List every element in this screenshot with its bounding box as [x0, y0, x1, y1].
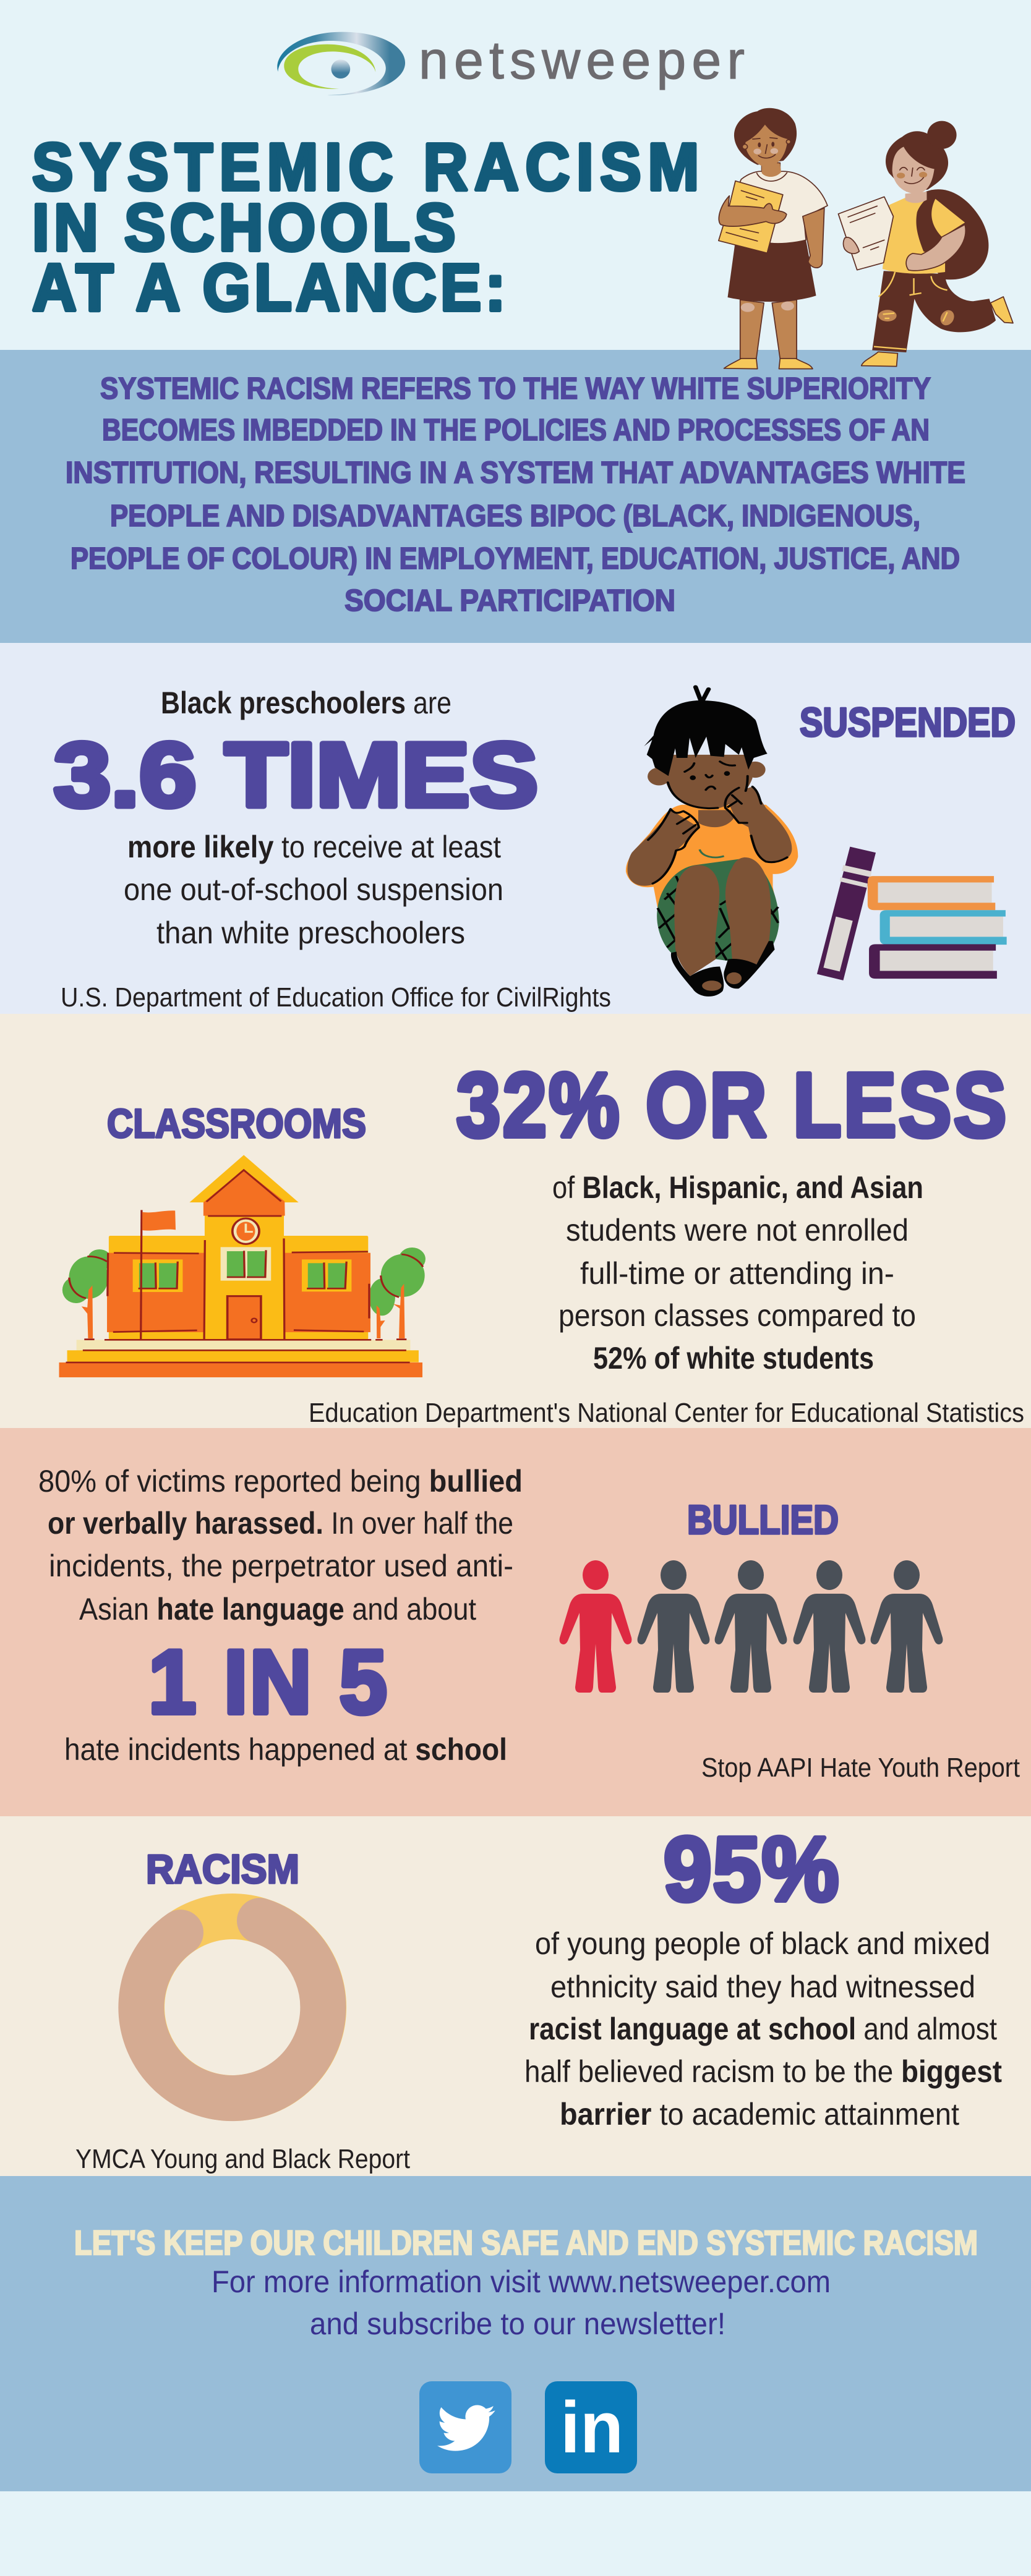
text block: bullying statistic: incidents, the perpetrator used anti-: [49, 1549, 513, 1583]
text block: racist language statistic: barrier to academic attainment: [560, 2097, 959, 2132]
heading: bullied: BULLIED: [687, 1497, 839, 1542]
text block: Black preschoolers statistic: [54, 686, 538, 950]
text block: more information: [212, 2264, 831, 2341]
text block: racist language statistic: ethnicity said they had witnessed: [550, 1970, 975, 2004]
text block: Black preschoolers statistic: one out-of-school suspension: [124, 872, 503, 907]
text block: enrollment statistic: [552, 1170, 923, 1375]
panel: bullied background: [0, 1428, 1031, 1816]
text block: definition of systemic racism: SOCIAL PARTICIPATION: [344, 584, 675, 618]
text block: enrollment statistic: 52% of white students: [593, 1341, 874, 1375]
panel: bottom strip: [0, 2491, 1031, 2576]
panel: definition background: [0, 350, 1031, 643]
text block: Black preschoolers statistic: than white preschoolers: [156, 916, 465, 950]
text block: more information: For more information visit www.netsweeper.com: [212, 2264, 831, 2299]
text block: bullying statistic: Asian hate language and about: [79, 1592, 476, 1626]
illustration: stack of books: [817, 847, 1007, 980]
illustration: two students: [719, 108, 1013, 369]
title: [32, 129, 699, 325]
text block: enrollment statistic: students were not enrolled: [566, 1213, 909, 1248]
illustration: school building: [59, 1155, 426, 1377]
heading: racism: RACISM: [146, 1846, 299, 1892]
big number: 32% or less: 32% OR LESS: [456, 1055, 1006, 1156]
text block: bullying statistic: [38, 1464, 523, 1767]
text block: definition of systemic racism: PEOPLE AND DISADVANTAGES BIPOC (BLACK, INDIGENOUS,: [110, 499, 920, 533]
title: AT A GLANCE:: [32, 250, 505, 325]
big number: 3.6 times: 3.6 TIMES: [54, 725, 538, 826]
icon: linkedin: [545, 2381, 637, 2473]
logo wordmark: netsweeper: [419, 31, 745, 90]
source: YMCA: YMCA Young and Black Report: [75, 2144, 410, 2174]
heading: classrooms: CLASSROOMS: [107, 1100, 366, 1146]
panel: classrooms background: [0, 1014, 1031, 1428]
big number: 1 in 5: 1 IN 5: [148, 1632, 387, 1733]
text block: racist language statistic: racist language at school and almost: [529, 2012, 997, 2046]
text block: enrollment statistic: of Black, Hispanic, and Asian: [552, 1170, 923, 1205]
person highlighted red: [560, 1560, 631, 1693]
text block: bullying statistic: 80% of victims reported being bullied: [38, 1464, 523, 1498]
panel: header background: [0, 0, 1031, 350]
chart: donut 95 percent: [141, 1916, 323, 2098]
text block: bullying statistic: hate incidents happened at school: [64, 1732, 507, 1767]
person grey 1: [638, 1560, 709, 1693]
title: IN SCHOOLS: [32, 190, 455, 265]
person grey 2: [715, 1560, 787, 1693]
text block: enrollment statistic: person classes compared to: [558, 1298, 916, 1333]
logo: netsweeper: [277, 31, 745, 95]
text block: definition of systemic racism: [66, 372, 965, 618]
text block: enrollment statistic: full-time or attending in-: [580, 1256, 894, 1291]
text block: Black preschoolers statistic: more likely to receive at least: [127, 830, 501, 864]
icon: twitter: [419, 2381, 511, 2473]
text block: definition of systemic racism: SYSTEMIC RACISM REFERS TO THE WAY WHITE SUPERIORITY: [100, 372, 931, 406]
illustration: sad boy: [626, 687, 798, 997]
text block: racist language statistic: half believed racism to be the biggest: [524, 2054, 1002, 2089]
icon: linkedin: in: [560, 2387, 623, 2468]
text block: racist language statistic: of young people of black and mixed: [535, 1926, 990, 1961]
student with backpack: [838, 121, 1013, 367]
text block: definition of systemic racism: INSTITUTION, RESULTING IN A SYSTEM THAT ADVANTAGES WHITE: [66, 456, 965, 490]
chart: five people, one highlighted: [560, 1560, 943, 1693]
student with folder: [719, 108, 828, 369]
text block: more information: and subscribe to our newsletter!: [310, 2306, 725, 2341]
big number: 95 percent: 95%: [664, 1819, 839, 1920]
panel: call to action background: [0, 2176, 1031, 2491]
person grey 3: [794, 1560, 865, 1693]
source: Office for Civil Rights: U.S. Department of Education Office for CivilRights: [61, 982, 611, 1013]
person grey 4: [871, 1560, 943, 1693]
text block: definition of systemic racism: BECOMES IMBEDDED IN THE POLICIES AND PROCESSES OF AN: [102, 414, 930, 447]
panel: racism background: [0, 1816, 1031, 2176]
text block: bullying statistic: or verbally harassed. In over half the: [48, 1506, 513, 1541]
text block: Black preschoolers statistic: Black preschoolers are: [161, 686, 451, 720]
text block: racist language statistic: [524, 1926, 1002, 2132]
panel: suspended background: [0, 643, 1031, 1014]
title: SYSTEMIC RACISM: [32, 129, 699, 204]
icon: netsweeper eye: [277, 32, 405, 95]
